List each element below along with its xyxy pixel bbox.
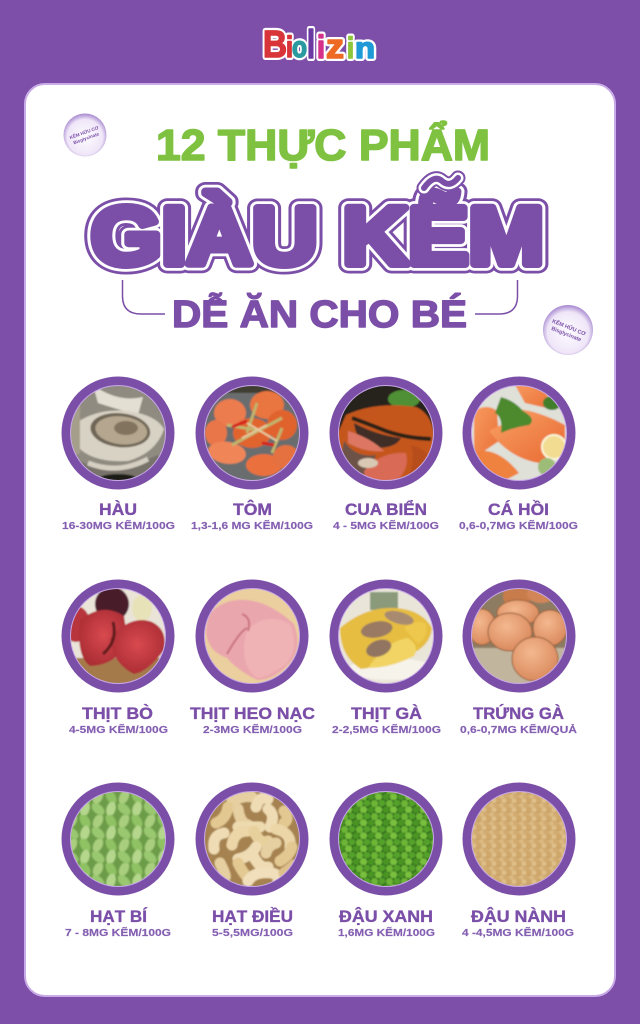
logo: Biolizin: n: [355, 32, 375, 65]
card: hạt bí: [62, 782, 174, 939]
name: thịt gà: THỊT GÀ: [351, 704, 422, 723]
title: giàu kẽm: GIÀU KẼM: [91, 191, 544, 282]
badge: organic zinc left: [64, 114, 106, 156]
card: cua biển: [330, 376, 442, 532]
logo: Biolizin: z: [326, 28, 344, 66]
name: hạt bí: HẠT BÍ: [90, 907, 147, 926]
logo: Biolizin: n: [355, 32, 375, 65]
zinc amount: hạt điều: 5-5,5MG/100G: [212, 927, 293, 939]
name: cua biển: CUA BIỂN: [345, 500, 427, 519]
zinc amount: trứng gà: 0,6-0,7MG KẼM/QUẢ: [460, 723, 577, 736]
logo: Biolizin: i: [347, 32, 354, 65]
photo: pork: [204, 588, 300, 684]
photo: salmon: [471, 385, 567, 481]
badge: organic zinc left: KẼM HỮU CƠ: [69, 124, 99, 140]
photo: cashews: [204, 791, 300, 887]
badge: organic zinc right: KẼM HỮU CƠ: [551, 318, 587, 338]
card: thịt bò: [62, 580, 174, 736]
photo: pumpkin seeds: [70, 791, 166, 887]
card: tôm: [191, 376, 313, 532]
zinc amount: thịt bò: 4-5MG KẼM/100G: [69, 723, 168, 736]
zinc amount: thịt heo nạc: 2-3MG KẼM/100G: [203, 723, 302, 736]
zinc amount: hạt bí: 7 - 8MG KẼM/100G: [65, 926, 171, 939]
name: hàu: HÀU: [99, 500, 137, 519]
card: trứng gà: [460, 580, 577, 736]
logo: Biolizin: i: [347, 32, 354, 65]
logo: Biolizin: [263, 23, 375, 67]
logo: Biolizin: i: [286, 31, 293, 64]
card: thịt gà: [330, 580, 442, 736]
name: trứng gà: TRỨNG GÀ: [473, 704, 564, 723]
logo: Biolizin: z: [326, 28, 344, 66]
logo: Biolizin: B: [263, 24, 287, 66]
logo: Biolizin: l: [307, 23, 315, 67]
zinc amount: đậu xanh: 1,6MG KẼM/100G: [338, 926, 435, 939]
card: đậu xanh: [330, 782, 442, 939]
photo: oyster: [70, 385, 166, 484]
photo: soybeans: [471, 791, 567, 887]
card: đậu nành: [462, 782, 576, 939]
badge: organic zinc right: [543, 305, 593, 355]
card: cá hồi: [459, 376, 578, 532]
name: đậu xanh: ĐẬU XANH: [339, 907, 433, 926]
card: thịt heo nạc: [190, 580, 315, 736]
badge: organic zinc left: Bisglycinate: [73, 131, 100, 145]
logo: Biolizin: o: [292, 31, 307, 64]
card: hạt điều: [196, 782, 308, 939]
badge: organic zinc right: Bisglycinate: [550, 326, 582, 343]
subtitle: dễ ăn cho bé: DỄ ĂN CHO BÉ: [172, 292, 467, 336]
logo: Biolizin: o: [292, 31, 307, 64]
photo: shrimp: [204, 385, 300, 481]
title: giàu kẽm: GIÀU KẼM: [91, 191, 544, 282]
zinc amount: cá hồi: 0,6-0,7MG KẼM/100G: [459, 519, 578, 532]
zinc amount: thịt gà: 2-2,5MG KẼM/100G: [332, 723, 441, 736]
photo: beef: [71, 589, 165, 683]
zinc amount: tôm: 1,3-1,6 MG KẼM/100G: [191, 519, 313, 532]
zinc amount: cua biển: 4 - 5MG KẼM/100G: [333, 519, 439, 532]
logo: Biolizin: i: [286, 31, 293, 64]
logo: Biolizin: B: [263, 24, 287, 66]
name: tôm: TÔM: [233, 500, 272, 519]
logo: Biolizin: l: [307, 23, 315, 67]
bracket: left: [122, 280, 165, 314]
bracket: right: [475, 280, 518, 314]
photo: mung beans: [338, 791, 434, 887]
zinc amount: hàu: 16-30MG KẼM/100G: [62, 519, 175, 532]
zinc amount: đậu nành: 4 -4,5MG KẼM/100G: [462, 926, 574, 939]
photo: eggs: [472, 589, 566, 683]
name: thịt heo nạc: THỊT HEO NẠC: [190, 705, 315, 723]
logo: Biolizin: i: [317, 29, 325, 65]
card: hàu: [62, 376, 175, 532]
logo: Biolizin: i: [317, 29, 325, 65]
title: giàu kẽm: GIÀU KẼM: [91, 191, 544, 282]
name: đậu nành: ĐẬU NÀNH: [471, 907, 566, 926]
title: 12 thực phẩm: 12 THỰC PHẨM: [156, 119, 490, 170]
name: thịt bò: THỊT BÒ: [82, 704, 153, 723]
photo: crab: [338, 385, 434, 481]
name: cá hồi: CÁ HỒI: [488, 500, 549, 519]
name: hạt điều: HẠT ĐIỀU: [212, 907, 293, 926]
photo: chicken: [338, 588, 434, 684]
